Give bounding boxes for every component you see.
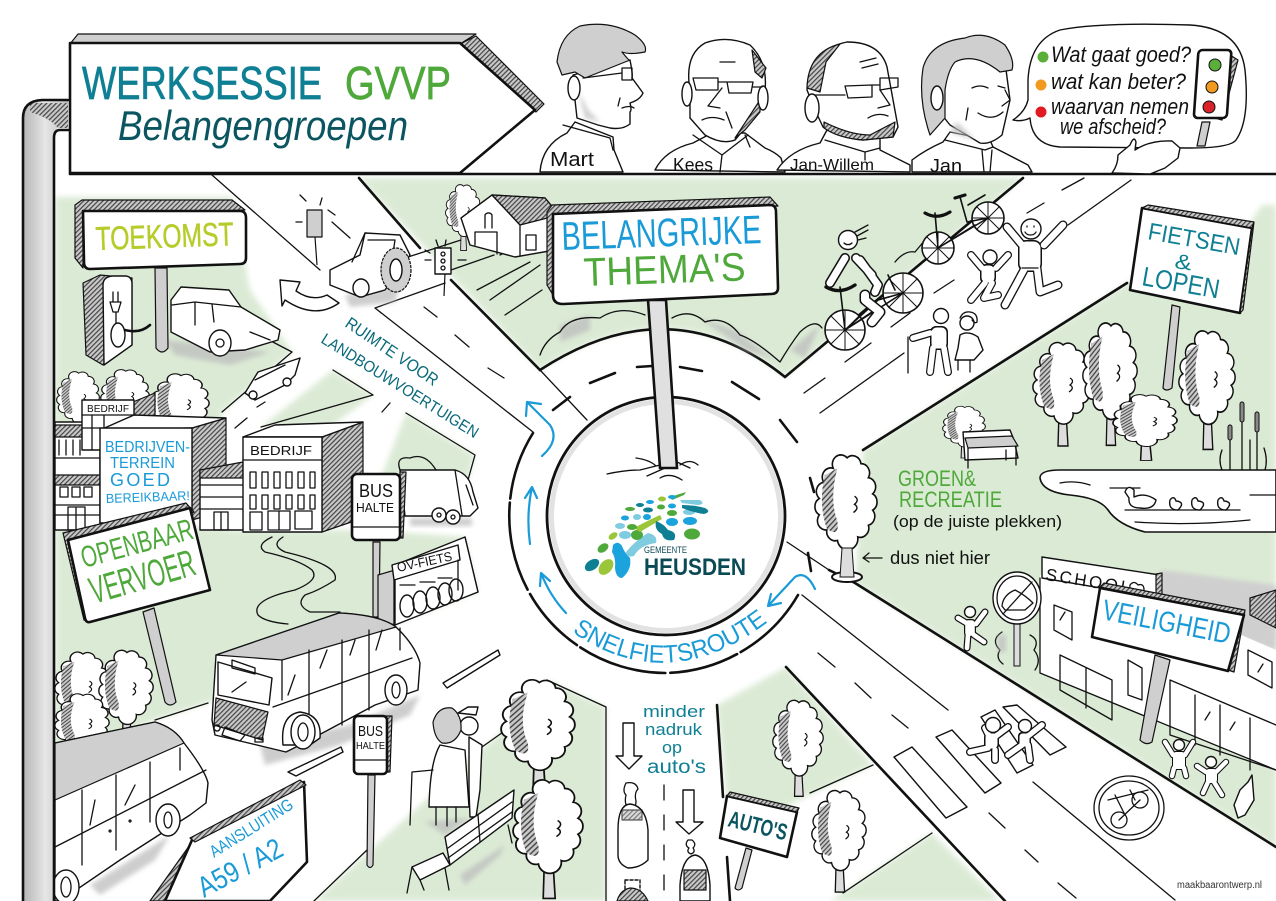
sign: fietsen en lopen: [1130, 205, 1254, 390]
pond: [1040, 470, 1276, 532]
name: Jan-Willem: [790, 157, 874, 174]
speech bubble: [1013, 24, 1246, 174]
child: [971, 250, 1008, 300]
tractor: [330, 233, 411, 307]
bicycle 2: [922, 195, 1004, 264]
white arrow at tractor: [280, 280, 339, 311]
bus stop sign 1: HALTE: [356, 500, 394, 515]
tree at roundabout: [815, 455, 877, 582]
subtitle: Belangengroepen: [118, 102, 408, 149]
rider: [830, 258, 878, 292]
portrait: jan-willem: [777, 42, 910, 174]
sign text: VEILIGHEID: [1100, 594, 1233, 651]
buildings: left block: [55, 422, 100, 530]
head: [573, 60, 643, 128]
trees bottom right: [773, 700, 866, 892]
sign text: OPENBAAR: [77, 513, 197, 575]
bus stop sign 2: HALTE: [356, 741, 385, 752]
charging station: [83, 275, 132, 365]
questions: waarvan nemen: [1051, 94, 1189, 119]
figure group: children at school: [1165, 740, 1254, 818]
portrait: mart: [540, 24, 646, 172]
bus stop sign 2: [354, 716, 392, 868]
figure: elderly walkers: [908, 308, 983, 373]
text: bedrijventerrein goed bereikbaar: GOED: [110, 470, 170, 490]
road lines and roundabout: [155, 175, 1276, 901]
questions: [1051, 42, 1192, 139]
building: bedrijf back: [82, 393, 155, 450]
road symbol: bicycle: [1094, 776, 1164, 840]
title text: WERKSESSIE: [82, 57, 322, 109]
text: minder nadruk op auto's: auto's: [647, 757, 706, 778]
title sign: [70, 34, 544, 173]
bus 1: [212, 613, 420, 765]
school building: [1040, 557, 1276, 770]
horizontal rule: [70, 173, 1276, 175]
trees centre bottom left: [501, 680, 583, 898]
elderly couple: [410, 707, 482, 835]
road markings: [288, 650, 500, 776]
bus 2: [53, 722, 208, 901]
traffic light: [1194, 50, 1238, 146]
sign text: &: [1173, 250, 1193, 275]
annotation: dus niet hier: dus niet hier: [890, 548, 990, 568]
hand: [1112, 139, 1180, 174]
stop text: BUS: [359, 481, 393, 501]
building: small middle block: [200, 462, 244, 530]
sign: auto's: [720, 792, 799, 890]
text: groen en recreatie: [893, 466, 1062, 531]
sign text: [192, 795, 297, 901]
text: groen en recreatie: RECREATIE: [899, 487, 1002, 512]
sign text: [77, 513, 200, 613]
question dots: [1036, 52, 1048, 118]
name: Mart: [550, 149, 594, 171]
portrait: jan: [912, 35, 1032, 176]
sign text: AUTO'S: [726, 806, 790, 845]
building: bedrijventerrein: [100, 415, 226, 523]
body: [540, 122, 623, 172]
label: BEDRIJF: [250, 443, 312, 458]
sign post toekomst: [155, 268, 168, 352]
text: bedrijventerrein goed bereikbaar: TERREIN: [110, 455, 175, 472]
logo text: GEMEENTE: [644, 545, 687, 555]
bushes left: [55, 650, 153, 767]
car at charger: [125, 287, 280, 365]
text: groen en recreatie: (op de juiste plekken): [893, 512, 1062, 531]
text: minder nadruk op auto's: minder: [643, 702, 705, 721]
no-cars sign: [993, 572, 1041, 666]
sign text: AANSLUITING: [206, 795, 297, 861]
text: ruimte voor landbouwvoertuigen: LANDBOUWVOERTUIGEN: [318, 331, 481, 442]
name: Kees: [673, 155, 713, 175]
figure: adult and child waving: [971, 219, 1063, 305]
central circle: [547, 397, 785, 635]
traffic light right: [425, 240, 466, 296]
blue route arrows: [525, 402, 815, 613]
questions: Wat gaat goed?: [1051, 42, 1192, 67]
hedge along roundabout: [540, 240, 925, 362]
winding path: [257, 537, 340, 624]
text: groen en recreatie: GROEN&: [898, 466, 976, 491]
sign text: LOPEN: [1140, 261, 1222, 304]
ducks: [1125, 487, 1230, 510]
sign post outline: [23, 100, 68, 901]
sign text: BELANGRIJKE: [561, 208, 762, 259]
bench: [407, 790, 514, 893]
tree behind farm: [446, 185, 480, 250]
text: minder nadruk op auto's: nadruk: [645, 720, 703, 739]
questions: wat kan beter?: [1051, 69, 1187, 94]
text: snelfietsroute: SNELFIETSROUTE: [574, 609, 767, 663]
sign: belangrijke thema's: THEMA'S: [583, 245, 746, 295]
ov-fiets stand: [378, 537, 478, 625]
label: SCHOOL: [1044, 565, 1131, 597]
credit: maakbaarontwerp.nl: [1177, 880, 1262, 891]
sign text: VERVOER: [85, 543, 200, 613]
questions: we afscheid?: [1060, 114, 1167, 139]
bicycle: [825, 273, 923, 350]
bench by the pond: [943, 406, 1018, 468]
sign text: [1140, 218, 1242, 304]
green areas: [55, 178, 1276, 901]
roundabout lane dashes: [553, 366, 797, 442]
bus stop sign 1: [352, 472, 406, 617]
trees right: [1033, 323, 1235, 460]
route curve guide: [572, 622, 768, 663]
figures on crosswalk: [970, 718, 1042, 760]
sign: aansluiting: [150, 780, 307, 901]
text: bedrijventerrein goed bereikbaar: BEDRIJVEN-: [105, 439, 190, 456]
label: OV-FIETS: [396, 549, 454, 575]
stop text: BUS: [358, 723, 383, 740]
bushes near no-cars sign: [995, 632, 1038, 670]
building: bedrijf: [243, 422, 363, 532]
portrait: kees: [655, 39, 785, 175]
sign: belangrijke thema's: [547, 197, 778, 480]
farm house: [461, 195, 559, 315]
cyclist 1: [825, 225, 923, 350]
text: bedrijventerrein goed bereikbaar: [105, 439, 190, 506]
logo: gemeente heusden: HEUSDEN: [644, 554, 746, 581]
figure: waving child: [958, 606, 985, 648]
text: ruimte voor landbouwvoertuigen: RUIMTE VOOR: [342, 314, 442, 390]
name: Jan: [930, 156, 962, 176]
label: BEDRIJF: [87, 404, 129, 415]
bushes behind company buildings: [57, 370, 209, 449]
text: bedrijventerrein goed bereikbaar: BEREIKBAAR!: [106, 488, 190, 506]
small car on road: [245, 358, 300, 400]
cattails: [1220, 402, 1266, 470]
text: minder nadruk op auto's: op: [662, 738, 682, 757]
traffic light left: [296, 195, 350, 265]
direction arrows centre: [616, 723, 703, 834]
sign: openbaar vervoer: [63, 503, 210, 705]
sign: toekomst: [75, 200, 246, 269]
sign post frame: [23, 100, 68, 901]
hair: [557, 24, 646, 78]
sign text: FIETSEN: [1146, 218, 1242, 261]
logo: gemeente heusden: [583, 492, 746, 581]
roundabout outer edge: [509, 329, 814, 673]
title accent: GVVP: [345, 57, 451, 109]
text: minder nadruk op auto's: [643, 702, 706, 778]
sign text: TOEKOMST: [95, 215, 234, 257]
crosswalk: [894, 705, 1066, 818]
centre road dashes: [235, 178, 1084, 898]
truck behind bus stop: [399, 456, 478, 526]
post corner hatching: [30, 103, 68, 128]
cars on road centre: [617, 783, 710, 901]
sign: veiligheid: [1092, 583, 1245, 744]
